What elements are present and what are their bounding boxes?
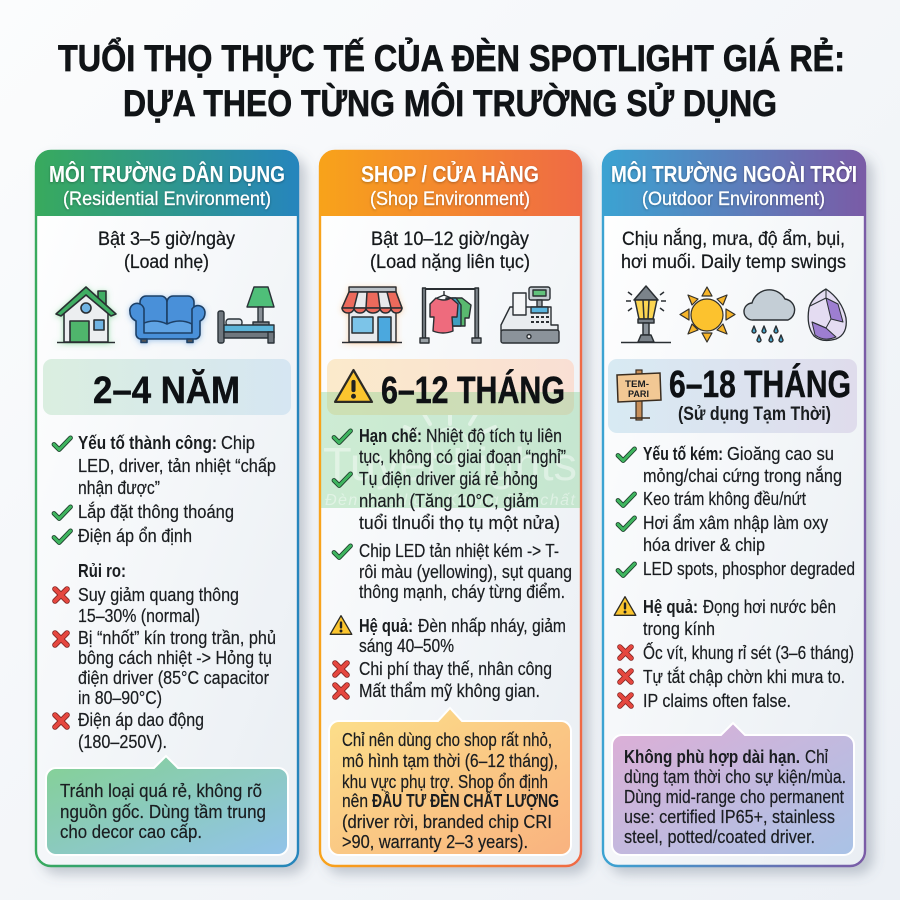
icon: rain cloud — [744, 290, 795, 342]
consequences list — [330, 616, 566, 701]
risks list: Bị “nhốt” kín trong trần, phủ — [78, 628, 276, 648]
callout: outdoor advice: dùng tạm thời cho sự kiện/mùa. — [624, 767, 846, 787]
usage description: (Load nhẹ) — [124, 252, 209, 273]
usage description: Chịu nắng, mưa, độ ẩm, bụi, — [622, 228, 845, 250]
panel: residential — [35, 151, 299, 866]
limitations list: Hạn chế: — [359, 426, 422, 446]
callout: residential advice — [46, 756, 288, 855]
callout: outdoor advice: Dùng mid-range cho permanent — [624, 787, 844, 807]
usage description — [621, 228, 846, 273]
icon: cash register — [501, 287, 559, 343]
weak points list: Keo trám không đều/nứt — [643, 489, 806, 509]
usage description: (Load nặng liên tục) — [370, 252, 530, 273]
limitations list: tuổi tlnuổi thọ tụ một nửa) — [359, 513, 560, 533]
consequences list: Mất thẩm mỹ không gian. — [359, 681, 540, 701]
watermark: Đèn Spotlight Không Đổi chất — [325, 491, 576, 509]
consequences list — [614, 597, 854, 711]
limitations list: thông mạnh, cháy từng điểm. — [359, 582, 565, 602]
consequences list: Ốc vít, khung rỉ sét (3–6 tháng) — [643, 642, 854, 663]
limitations list: rôi màu (yellowing), sụt quang — [359, 562, 572, 582]
risks list: Điện áp dao động — [78, 710, 204, 730]
success factors list: Yếu tố thành công: — [78, 433, 217, 453]
risks list: Suy giảm quang thông — [78, 585, 239, 605]
icon: bed and lamp — [218, 287, 274, 343]
risks list: bông cách nhiệt -> Hỏng tụ — [78, 648, 272, 668]
weak points list: Hơi ẩm xâm nhập làm oxy — [643, 513, 828, 533]
weak points list: mỏng/chai cứng trong nắng — [643, 465, 842, 486]
icon: temporary sign: TEM- — [625, 379, 649, 390]
usage description: hơi muối. Daily temp swings — [621, 252, 846, 273]
callout: shop advice: nên — [342, 791, 368, 811]
title — [58, 36, 845, 124]
success factors list: LED, driver, tản nhiệt “chấp — [78, 456, 276, 476]
callout: outdoor advice: steel, potted/coated driver. — [624, 827, 815, 847]
duration badge: 2–4 năm: 2–4 NĂM — [93, 368, 240, 412]
weak points list: LED spots, phosphor degraded — [643, 559, 855, 579]
duration badge: 6–18 tháng: (Sử dụng Tạm Thời) — [678, 404, 831, 425]
callout: residential advice: Tránh loại quá rẻ, không rõ — [60, 781, 262, 801]
weak points list: Gioăng cao su — [727, 444, 834, 464]
callout: outdoor advice — [612, 723, 854, 855]
limitations list: nhanh (Tăng 10°C, giảm — [359, 491, 539, 511]
consequences list: sáng 40–50% — [359, 636, 454, 656]
watermark — [321, 392, 580, 509]
watermark: Tuyet Lights — [323, 438, 577, 490]
callout: residential advice: nguồn gốc. Dùng tầm trung — [60, 802, 266, 822]
success factors list: Lắp đặt thông thoáng — [78, 501, 234, 522]
callout: shop advice: ĐẦU TƯ ĐÈN CHẤT LƯỢNG — [372, 790, 559, 811]
success factors list: Điện áp ổn định — [78, 526, 192, 546]
callout: outdoor advice: use: certified IP65+, stainless — [624, 807, 835, 827]
duration badge: 6–12 tháng: 6–12 THÁNG — [381, 368, 565, 412]
consequences list: Đọng hơi nước bên — [703, 597, 836, 617]
callout: shop advice: khu vực phụ trợ. Shop ổn định — [342, 772, 548, 792]
consequences list: Chi phí thay thế, nhân công — [359, 659, 552, 679]
panel header: shop: (Shop Environment) — [370, 189, 530, 210]
icon: clothing rack — [420, 288, 481, 343]
icon: sun — [680, 287, 735, 342]
callout: shop advice: mô hình tạm thời (6–12 tháng), — [342, 751, 558, 771]
usage description: Bật 3–5 giờ/ngày — [98, 229, 235, 250]
success factors list: Chip — [221, 433, 255, 453]
icon: temporary sign: PARI — [628, 389, 649, 400]
callout: shop advice: Chỉ nên dùng cho shop rất nhỏ, — [342, 730, 552, 750]
panel header: residential — [35, 151, 299, 216]
usage description — [370, 229, 530, 273]
weak points list — [618, 444, 855, 579]
consequences list: Tự tắt chập chờn khi mưa to. — [643, 666, 845, 687]
icon: garden lamp — [621, 286, 671, 342]
limitations list: tục, không có giai đoạn “nghỉ” — [359, 447, 566, 467]
risks list: điện driver (85°C capacitor — [78, 668, 269, 688]
icon: house — [56, 287, 116, 342]
weak points list: Yếu tố kém: — [643, 444, 723, 464]
limitations list — [334, 426, 572, 602]
duration badge: 6–18 tháng: 6–18 THÁNG — [669, 362, 851, 406]
limitations list: Tụ điện driver giá rẻ hỏng — [359, 469, 538, 489]
risks list — [55, 561, 276, 752]
consequences list: Đèn nhấp nháy, giảm — [418, 616, 566, 636]
panel: shop — [319, 151, 582, 866]
consequences list: IP claims often false. — [643, 691, 791, 711]
usage description — [98, 229, 235, 273]
usage description: Bật 10–12 giờ/ngày — [371, 229, 529, 250]
duration badge: 6–18 tháng — [608, 359, 857, 433]
panel: outdoor — [602, 151, 866, 866]
panel header: shop — [319, 151, 582, 216]
weak points list: hóa driver & chip — [643, 535, 765, 555]
success factors list — [54, 433, 276, 546]
callout: outdoor advice: Chỉ — [805, 747, 828, 767]
callout: shop advice — [329, 708, 571, 855]
title: DỰA THEO TỪNG MÔI TRƯỜNG SỬ DỤNG — [123, 82, 777, 124]
risks list: Rủi ro: — [78, 561, 126, 581]
consequences list: Hệ quả: — [359, 616, 413, 636]
consequences list: Hệ quả: — [643, 597, 698, 617]
duration badge: 6–12 tháng — [327, 359, 574, 415]
callout: shop advice: (driver rời, branded chip CRI — [342, 812, 552, 832]
limitations list: Nhiệt độ tích tụ liên — [426, 426, 562, 446]
callout: outdoor advice: Không phù hợp dài hạn. — [624, 747, 800, 767]
panel header: residential: MÔI TRƯỜNG DÂN DỤNG — [49, 160, 285, 187]
limitations list: Chip LED tản nhiệt kém -> T- — [359, 541, 559, 561]
duration badge: 2–4 năm — [43, 359, 291, 415]
icon: sofa — [130, 296, 205, 342]
icon: crystal — [808, 289, 846, 340]
risks list: (180–250V). — [78, 732, 167, 752]
callout: shop advice: >90, warranty 2–3 years). — [342, 832, 528, 852]
success factors list: nhận được” — [78, 478, 160, 498]
risks list: in 80–90°C) — [78, 688, 162, 708]
consequences list: trong kính — [643, 619, 715, 639]
icon: warning — [335, 370, 372, 402]
panel header: outdoor — [602, 151, 866, 216]
panel header: outdoor: (Outdoor Environment) — [642, 189, 825, 210]
risks list: 15–30% (normal) — [78, 606, 200, 626]
panel header: residential: (Residential Environment) — [63, 189, 271, 210]
icon: temporary sign — [617, 370, 661, 420]
icon: storefront — [342, 287, 402, 342]
panel header: shop: SHOP / CỬA HÀNG — [361, 159, 539, 187]
callout: residential advice: cho decor cao cấp. — [60, 822, 202, 842]
